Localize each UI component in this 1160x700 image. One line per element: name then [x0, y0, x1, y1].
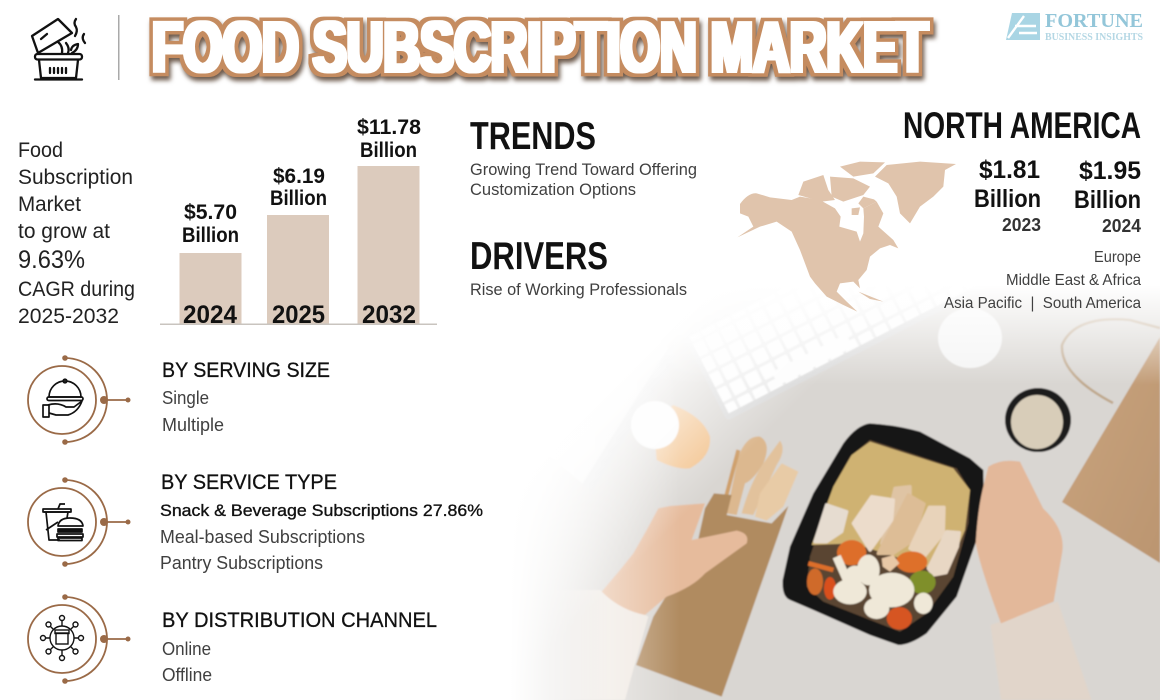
trends: Customization Options	[470, 181, 636, 199]
notebook	[510, 330, 675, 490]
bar 2032: 2032	[362, 301, 416, 329]
logo: Fortune Business Insights	[1006, 11, 1143, 43]
bar 2025: Billion	[270, 187, 327, 210]
bar 2025	[267, 165, 329, 329]
bottle	[631, 401, 710, 469]
photo: meal tray on a desk	[541, 303, 1160, 700]
fade overlays	[541, 303, 754, 535]
icon: serving size	[28, 355, 130, 445]
segment: by distribution channel: Offline	[162, 665, 212, 685]
meal tray	[783, 423, 984, 645]
other regions: Middle East & Africa	[1006, 272, 1141, 289]
North America 2024 value: Billion	[1074, 186, 1141, 214]
paper bag with handle	[1062, 319, 1160, 563]
segment: by distribution channel: BY DISTRIBUTION CHANNEL	[162, 609, 437, 632]
hand	[602, 503, 747, 615]
bar 2024: Billion	[182, 224, 239, 247]
logo: Fortune Business Insights: BUSINESS INSIGHTS	[1045, 32, 1143, 43]
segment: by service type: BY SERVICE TYPE	[161, 471, 337, 494]
bar 2024	[180, 201, 242, 329]
segment: by service type: Pantry Subscriptions	[160, 553, 323, 573]
segment: by service type: Snack & Beverage Subscriptions 27.86%	[160, 501, 483, 520]
North America 2024 value	[1074, 157, 1141, 236]
trends: Growing Trend Toward Offering	[470, 161, 697, 179]
drivers: DRIVERS	[470, 235, 608, 278]
segment: by serving size: BY SERVING SIZE	[162, 359, 330, 382]
North America 2023 value: 2023	[1002, 215, 1041, 235]
North America 2023 value	[974, 156, 1041, 235]
header divider	[118, 15, 120, 80]
CAGR text block: 9.63%	[18, 246, 85, 274]
other regions: Asia Pacific | South America	[944, 295, 1141, 312]
keyboard	[702, 304, 933, 414]
CAGR text block: to grow at	[18, 220, 110, 243]
bar chart: market size	[160, 116, 437, 329]
North America 2023 value: $1.81	[979, 156, 1040, 184]
segment: by serving size: Multiple	[162, 415, 224, 435]
grain	[812, 442, 970, 573]
segment: by service type	[160, 471, 483, 573]
napkin	[636, 493, 788, 697]
segment: by serving size: Single	[162, 388, 209, 408]
icon: distribution channel	[28, 594, 130, 684]
bar 2032: $11.78	[357, 116, 421, 139]
drivers	[470, 235, 687, 299]
juice bottle, cutlery, kraft napkin and left hand	[594, 402, 798, 700]
CAGR text block: Market	[18, 193, 81, 216]
other regions: Europe	[1094, 249, 1141, 266]
computer mouse	[938, 308, 1002, 368]
bar 2025: 2025	[272, 301, 325, 329]
segment: by service type: Meal-based Subscriptions	[160, 527, 365, 547]
CAGR text block: Food	[18, 139, 63, 162]
icon: service type	[28, 477, 130, 567]
icon: food basket with lid	[32, 19, 85, 80]
cauliflower	[833, 555, 933, 619]
other regions	[944, 249, 1141, 312]
CAGR text block: CAGR during	[18, 278, 135, 301]
CAGR text block	[18, 139, 135, 328]
trends: TRENDS	[470, 115, 596, 158]
segment: by distribution channel: Online	[162, 639, 211, 659]
CAGR text block: Subscription	[18, 166, 133, 189]
bar 2024: $5.70	[184, 201, 237, 224]
logo: Fortune Business Insights: FORTUNE	[1045, 11, 1143, 32]
map: North America	[737, 162, 956, 312]
North America 2023 value: Billion	[974, 185, 1041, 213]
carrots	[837, 540, 866, 565]
chicken slices	[815, 487, 959, 575]
trends	[470, 115, 697, 199]
drivers: Rise of Working Professionals	[470, 281, 687, 299]
bar 2032: Billion	[360, 139, 417, 162]
sauce cup	[1005, 388, 1071, 452]
segment: by serving size	[162, 359, 330, 435]
sleeve	[594, 591, 648, 700]
bar 2025: $6.19	[273, 165, 325, 188]
CAGR text block: 2025-2032	[18, 305, 119, 328]
right hand and sleeve	[974, 460, 1064, 624]
desk surface	[541, 303, 1160, 700]
bar 2024: 2024	[183, 301, 237, 329]
broccoli	[909, 571, 936, 594]
segment: by distribution channel	[162, 609, 437, 685]
bar 2032	[357, 116, 421, 329]
cutlery	[722, 437, 798, 521]
North America 2024 value: $1.95	[1079, 157, 1141, 185]
North America 2024 value: 2024	[1102, 216, 1141, 236]
